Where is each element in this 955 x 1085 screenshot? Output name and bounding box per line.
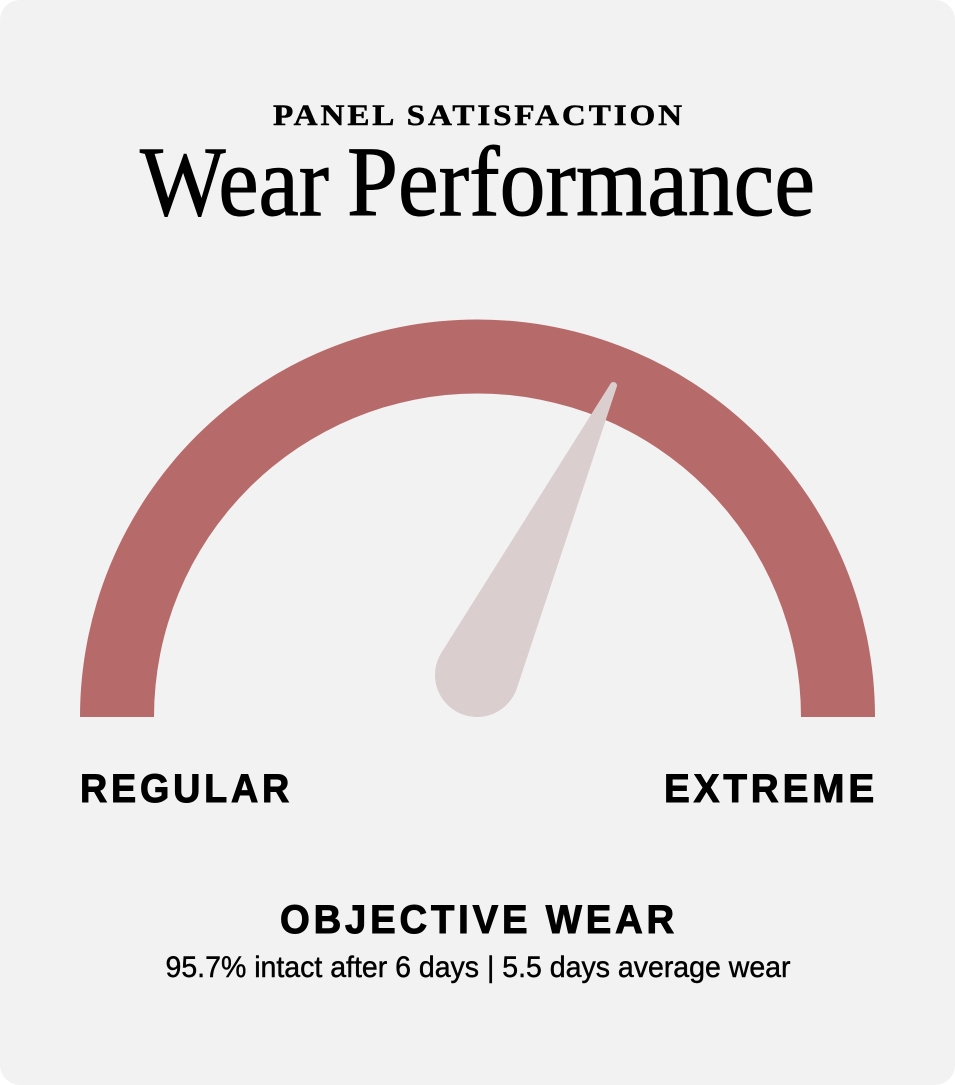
objective wear heading: OBJECTIVE WEAR — [280, 898, 678, 942]
objective wear statistics: 95.7% intact after 6 days | 5.5 days average wear — [166, 951, 791, 984]
title — [140, 126, 815, 237]
label: extreme: EXTREME — [664, 767, 878, 811]
eyebrow heading: PANEL SATISFACTION — [273, 99, 685, 132]
gauge needle — [435, 382, 617, 717]
title: Performance — [347, 126, 815, 237]
gauge arc — [80, 319, 875, 717]
title: Wear — [140, 126, 329, 237]
label: regular: REGULAR — [80, 767, 293, 811]
